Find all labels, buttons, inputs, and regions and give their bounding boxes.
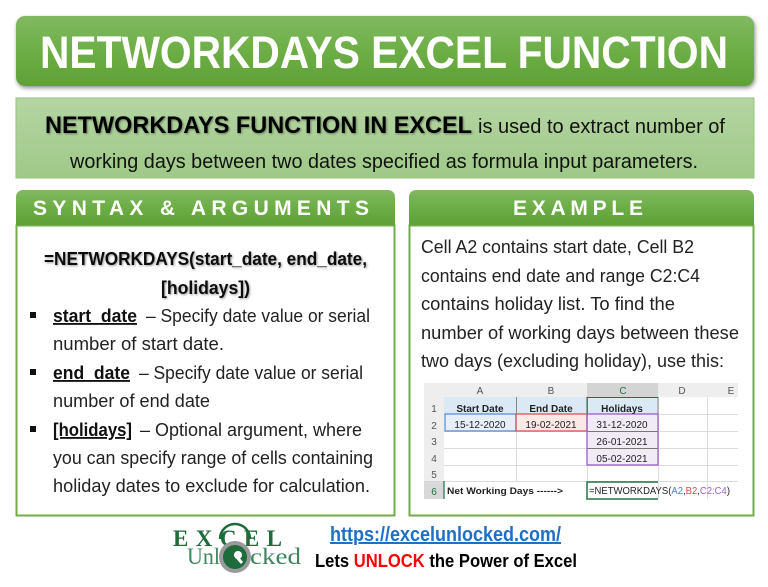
example description — [421, 236, 739, 371]
syntax formula — [44, 249, 367, 298]
example description: two days (excluding holiday), use this: — [421, 350, 724, 371]
panel: definition — [16, 98, 754, 178]
column headers: A — [477, 386, 484, 397]
argument: end_date — [30, 362, 363, 411]
syntax formula: =NETWORKDAYS(start_date, end_date, — [44, 249, 367, 269]
table cells — [454, 404, 648, 465]
syntax header: SYNTAX & ARGUMENTS — [33, 197, 369, 220]
example header: EXAMPLE — [513, 197, 643, 220]
panel: syntax and arguments — [16, 190, 395, 516]
logo wordmark bottom: cked — [250, 544, 302, 569]
logo wordmark bottom: Unl — [187, 544, 220, 569]
argument: start_date — [30, 305, 370, 354]
net working days label: Net Working Days ------> — [447, 486, 563, 497]
column headers — [477, 386, 735, 397]
example description: number of working days between these — [421, 322, 739, 343]
table cells: 26-01-2021 — [596, 437, 648, 448]
definition line 2: working days between two dates specified as formula input parameters. — [69, 151, 698, 173]
example description: contains holiday list. To find the — [421, 293, 675, 314]
logo wordmark top: EXCEL — [173, 526, 282, 551]
definition heading: NETWORKDAYS FUNCTION IN EXCEL — [45, 112, 472, 139]
argument: end_date: number of end date — [53, 390, 210, 411]
website link: https://excelunlocked.com/ — [330, 524, 561, 546]
argument: holidays: holiday dates to exclude for calculation. — [53, 475, 370, 496]
table cells: Holidays — [601, 404, 643, 415]
definition line 1: is used to extract number of — [478, 116, 725, 138]
argument: holidays: [holidays] — [53, 419, 132, 440]
argument: end_date: end_date — [53, 362, 130, 383]
table cells: End Date — [529, 404, 573, 415]
formula cell: =NETWORKDAYS(A2,B2,C2:C4) — [589, 486, 730, 497]
row headers: 3 — [431, 437, 437, 448]
panel: example — [409, 190, 754, 516]
column headers: E — [728, 386, 735, 397]
argument: holidays: – Optional argument, where — [140, 419, 362, 440]
tagline: Lets UNLOCK the Power of Excel — [315, 551, 577, 571]
spreadsheet example — [424, 383, 738, 499]
example header — [409, 190, 754, 225]
argument: end_date: – Specify date value or serial — [139, 362, 363, 383]
row headers: 4 — [431, 454, 437, 465]
row headers — [431, 404, 437, 498]
example description: Cell A2 contains start date, Cell B2 — [421, 236, 694, 257]
table cells: 31-12-2020 — [596, 420, 648, 431]
column headers: B — [548, 386, 555, 397]
argument: start_date: – Specify date value or serial — [146, 305, 370, 326]
argument: start_date: start_date — [53, 305, 137, 326]
icon: padlock — [219, 524, 251, 573]
row headers: 5 — [431, 470, 437, 481]
column headers: D — [678, 386, 686, 397]
column headers: C — [619, 386, 627, 397]
argument: holidays: you can specify range of cells containing — [53, 447, 373, 468]
row headers: 1 — [431, 404, 437, 415]
example description: contains end date and range C2:C4 — [421, 265, 700, 286]
row headers: 2 — [431, 421, 437, 432]
table cells: 05-02-2021 — [596, 454, 648, 465]
table cells: Start Date — [456, 404, 504, 415]
syntax formula: [holidays]) — [161, 278, 250, 298]
title banner — [16, 16, 754, 86]
row headers: 6 — [431, 487, 437, 498]
table cells: 15-12-2020 — [454, 420, 506, 431]
logo: Excel Unlocked — [173, 524, 302, 573]
logo wordmark bottom — [187, 544, 302, 569]
argument: start_date: number of start date. — [53, 333, 224, 354]
table cells: 19-02-2021 — [525, 420, 577, 431]
syntax header — [16, 190, 395, 225]
argument: holidays — [30, 419, 373, 496]
